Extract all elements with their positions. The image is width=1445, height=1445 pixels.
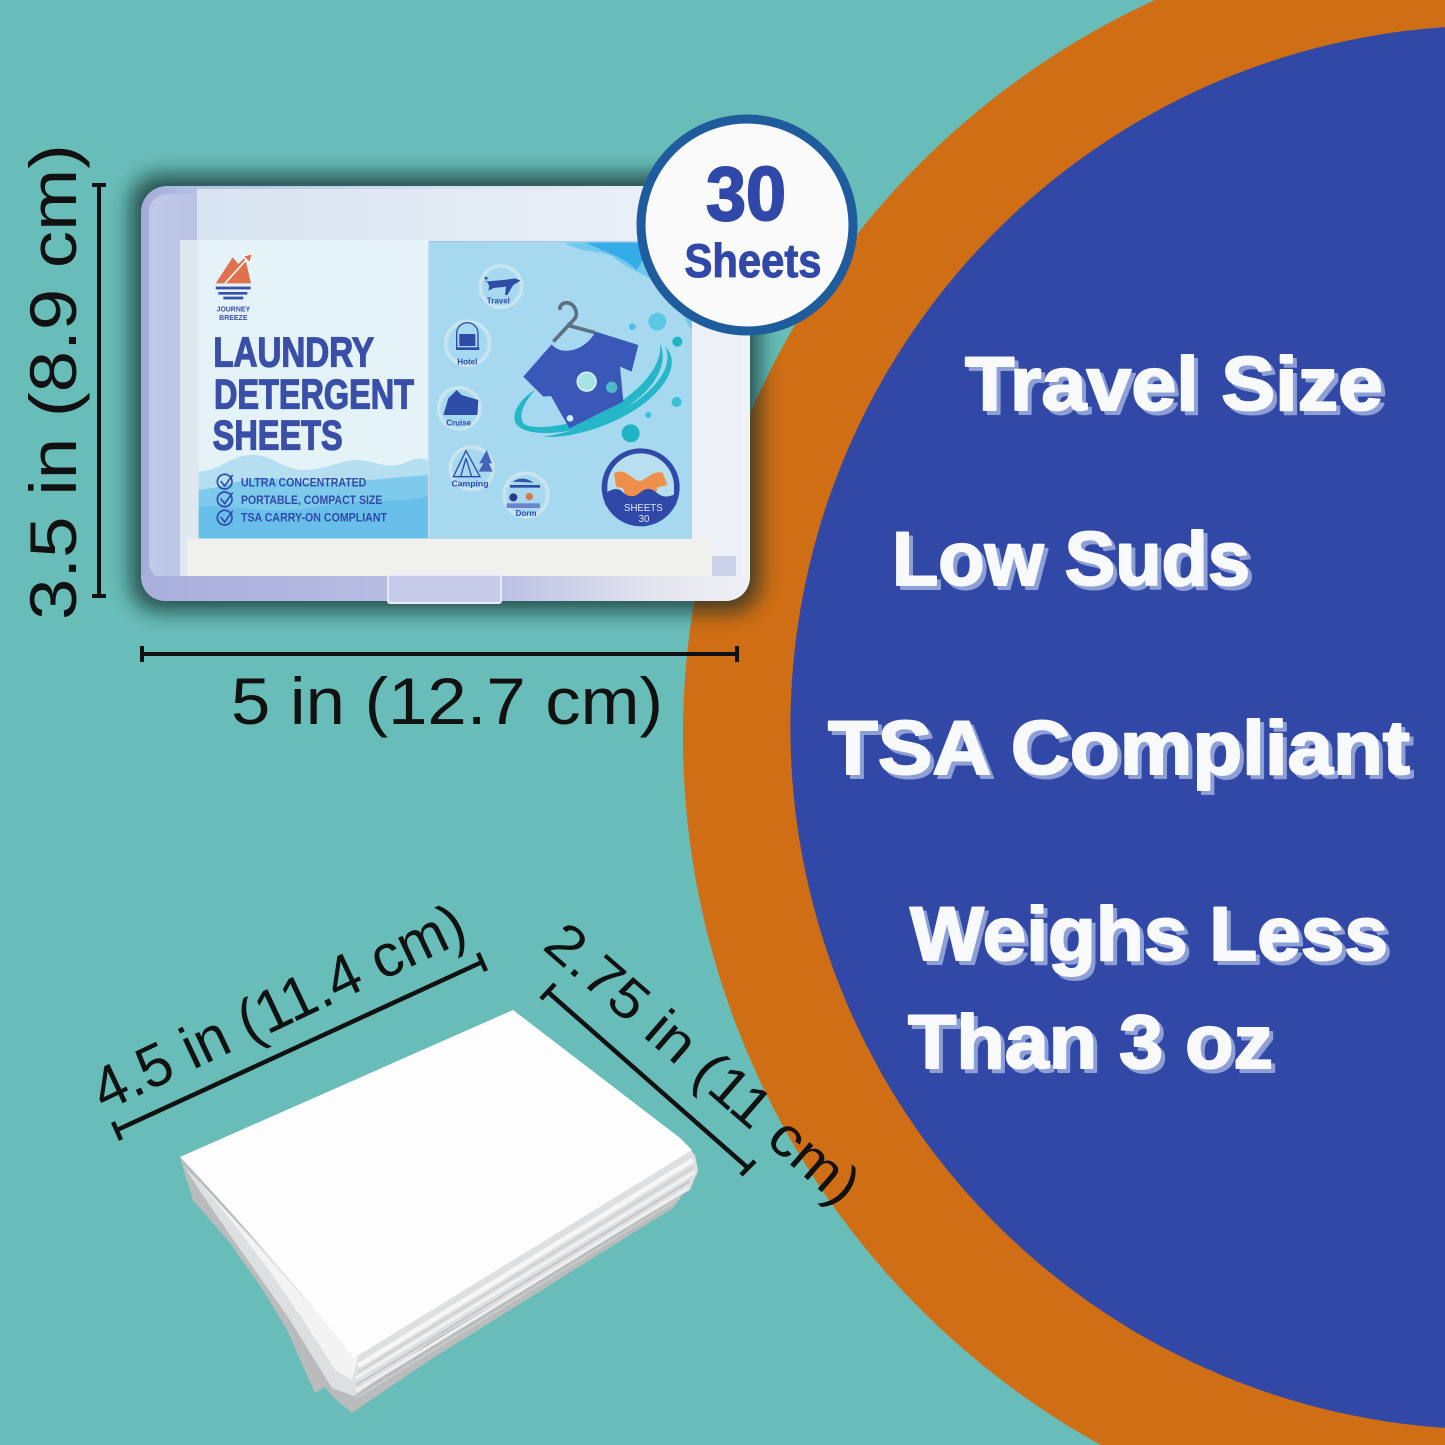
icon: dorm: Dorm xyxy=(516,509,536,518)
icon: travel: Travel xyxy=(487,296,510,305)
t-shirt xyxy=(523,332,638,428)
label bullet text: PORTABLE, COMPACT SIZE xyxy=(241,493,382,507)
sheet stack xyxy=(180,1010,698,1413)
hanger xyxy=(553,303,595,342)
splash xyxy=(565,243,692,330)
label title: LAUNDRY xyxy=(213,330,374,376)
label title: SHEETS xyxy=(213,412,343,458)
label bullet text xyxy=(241,476,388,524)
badge: 30 sheets: 30 xyxy=(706,152,786,237)
dimension: sheet width: 2.75 in (11 cm) xyxy=(533,910,873,1217)
badge: 30 sheets: Sheets xyxy=(684,234,822,287)
sheets 30 seal xyxy=(602,448,680,526)
dimension: sheet length: 4.5 in (11.4 cm) xyxy=(81,890,476,1124)
feature: low suds: Low Suds xyxy=(896,521,1254,606)
logo mountain xyxy=(216,257,251,283)
feature: travel size: Travel Size xyxy=(969,346,1387,431)
feature: tsa compliant: TSA Compliant xyxy=(828,706,1410,791)
logo waves xyxy=(216,287,251,299)
label bullet text: ULTRA CONCENTRATED xyxy=(241,476,367,490)
label wave xyxy=(199,455,428,538)
blue circle panel xyxy=(790,27,1445,1428)
badge: 30 sheets xyxy=(641,119,853,331)
label title xyxy=(213,330,414,458)
sheets 30 seal: 30 xyxy=(639,514,649,525)
icon: camping xyxy=(448,445,495,492)
icon: cruise xyxy=(437,386,482,431)
icon: travel xyxy=(478,264,524,309)
icon: hotel: Hotel xyxy=(457,357,477,366)
label title: DETERGENT xyxy=(214,372,414,418)
icon: camping: Camping xyxy=(451,479,489,489)
icon: cruise: Cruise xyxy=(446,418,472,427)
feature: weighs less than 3 oz: Than 3 oz xyxy=(912,1004,1277,1089)
product box photo xyxy=(130,174,760,612)
logo text: JOURNEY xyxy=(216,307,251,314)
dimension: box width xyxy=(142,646,737,738)
feature: weighs less than 3 oz: Than 3 oz xyxy=(908,1000,1273,1085)
logo text xyxy=(216,307,251,322)
orange ring xyxy=(683,0,1445,1445)
label: left panel xyxy=(199,240,429,538)
dimension: box width: 5 in (12.7 cm) xyxy=(231,664,663,738)
box clasp xyxy=(388,575,501,603)
sheets 30 seal: SHEETS xyxy=(624,503,663,514)
label check bullets xyxy=(217,474,233,525)
feature: travel size: Travel Size xyxy=(965,342,1383,427)
dimension: box height: 3.5 in (8.9 cm) xyxy=(16,144,90,620)
icon: dorm xyxy=(502,471,550,519)
label bullet text: TSA CARRY-ON COMPLIANT xyxy=(241,510,388,524)
icon: hotel xyxy=(444,319,492,367)
feature: low suds: Low Suds xyxy=(892,517,1250,602)
label: right panel xyxy=(429,242,692,539)
swoosh xyxy=(514,343,663,433)
feature: weighs less than 3 oz: Weighs Less xyxy=(910,892,1388,977)
feature: tsa compliant: TSA Compliant xyxy=(832,710,1414,795)
logo text: BREEZE xyxy=(219,315,248,322)
feature list xyxy=(828,342,1414,1089)
feature: weighs less than 3 oz: Weighs Less xyxy=(914,896,1392,981)
logo arrow xyxy=(225,253,253,283)
feature: weighs less than 3 oz xyxy=(908,892,1392,1089)
bubbles xyxy=(567,313,682,442)
